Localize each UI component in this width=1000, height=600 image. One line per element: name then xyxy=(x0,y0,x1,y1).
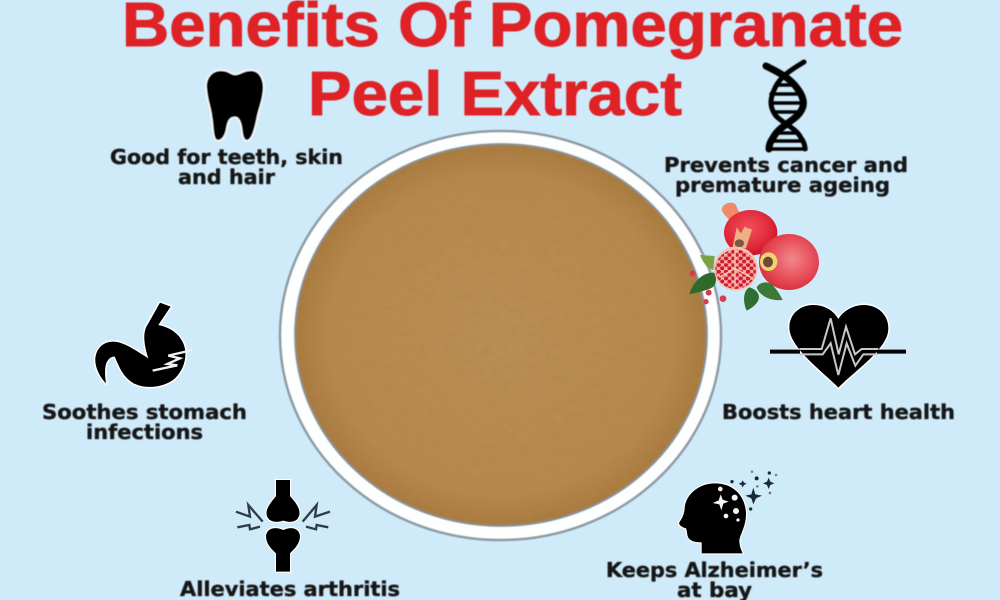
label: Prevents cancer and xyxy=(664,153,908,177)
icon: DNA helix xyxy=(766,62,806,149)
icon: head with stars xyxy=(679,470,777,553)
whole fruit, back xyxy=(722,203,777,255)
benefit: heart health xyxy=(722,305,955,424)
benefit: cancer and ageing xyxy=(664,62,908,197)
label xyxy=(42,400,247,444)
icon: tooth xyxy=(207,71,263,140)
benefit: Alzheimer's xyxy=(606,470,823,600)
bowl of pomegranate peel powder xyxy=(280,131,721,540)
title xyxy=(122,0,903,129)
whole fruit, right xyxy=(759,234,819,290)
benefit: stomach infections xyxy=(42,303,247,444)
label xyxy=(606,558,823,600)
label: Boosts heart health xyxy=(722,400,955,424)
seeds xyxy=(690,270,726,304)
label: premature ageing xyxy=(675,173,890,197)
pomegranate fruit illustration xyxy=(689,203,819,311)
cut fruit xyxy=(714,227,758,291)
icon: heart with pulse xyxy=(770,305,906,388)
icon: knee joint xyxy=(236,480,330,572)
label: Soothes stomach xyxy=(42,400,247,424)
benefit: arthritis xyxy=(180,480,400,600)
bowl rim xyxy=(280,131,721,540)
label xyxy=(664,153,908,197)
powder xyxy=(295,144,707,526)
icon: stomach xyxy=(95,303,193,387)
label: infections xyxy=(86,420,203,444)
title: Peel Extract xyxy=(308,60,682,129)
label: Keeps Alzheimer’s xyxy=(606,558,823,582)
label xyxy=(110,145,343,189)
leaves xyxy=(689,255,783,311)
benefit: teeth, skin and hair xyxy=(110,71,343,189)
label: Good for teeth, skin xyxy=(110,145,343,169)
label: and hair xyxy=(178,165,275,189)
